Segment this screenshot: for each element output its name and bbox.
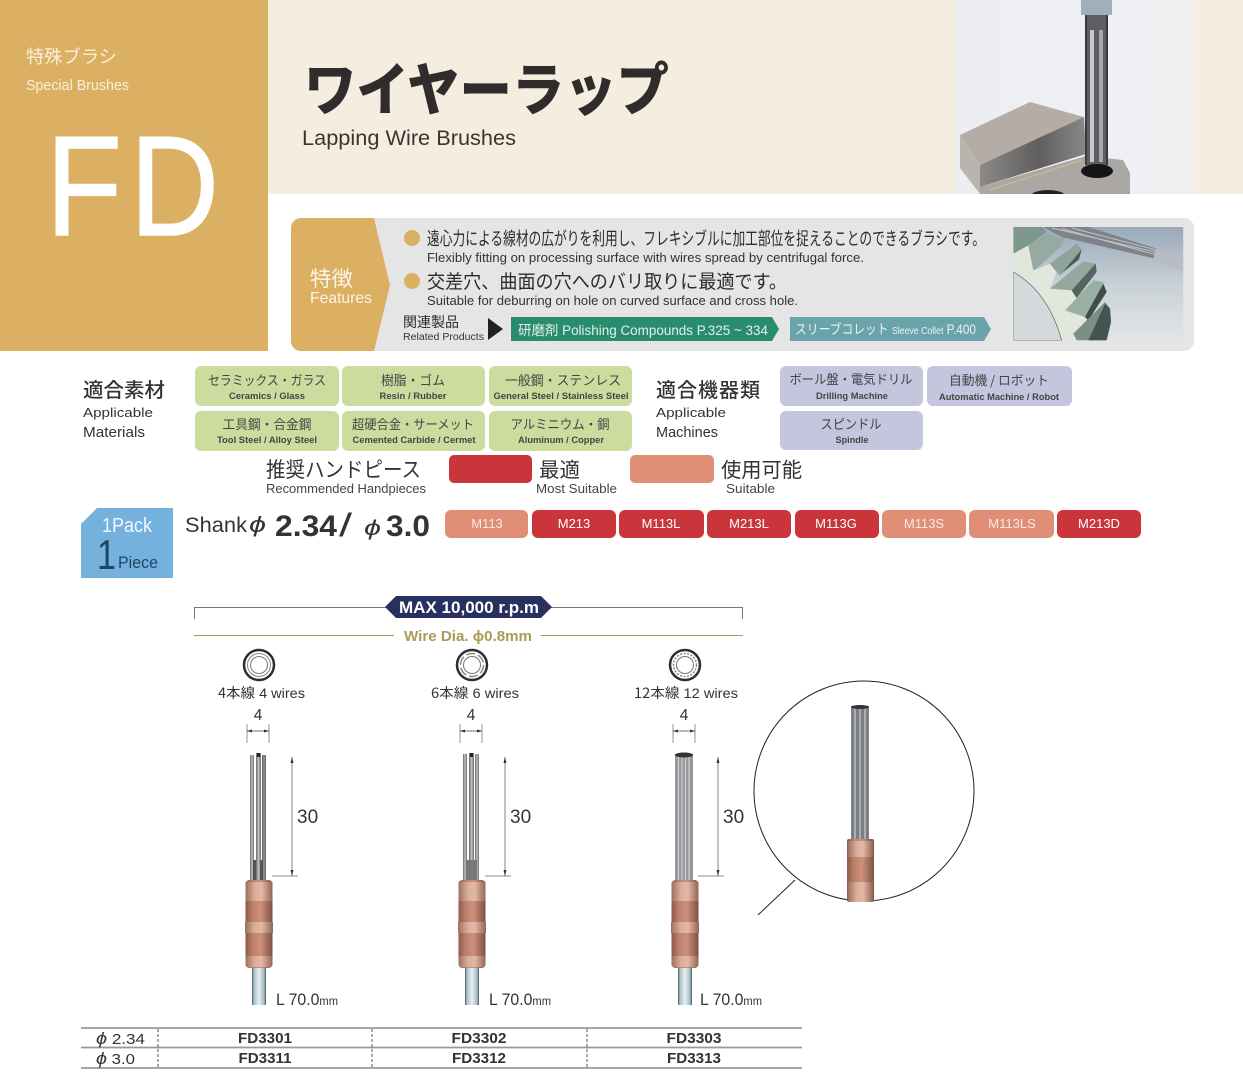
label: 4 wires: 4本線 4 wires: [218, 683, 305, 703]
category panel: FD: [0, 0, 268, 351]
magnified wires: [851, 705, 869, 842]
material: aluminum: Aluminum / Copper: [518, 435, 604, 446]
material: aluminum: アルミニウム・銅: [510, 414, 610, 433]
machine: automatic: Automatic Machine / Robot: [939, 392, 1060, 403]
machine: spindle: スピンドル: [820, 413, 882, 433]
material: ceramics: セラミックス・ガラス: [208, 370, 326, 389]
dimension: width 4: 4: [254, 707, 263, 724]
label: 12 wires: 12本線 12 wires: [634, 683, 738, 703]
shank diameter: [185, 507, 430, 543]
machine: drilling: ボール盤・電気ドリル: [790, 369, 912, 388]
feature 2: 交差穴、曲面の穴へのバリ取りに最適です。: [427, 267, 787, 294]
dimension: length 30: 30: [297, 807, 318, 828]
badge: 1 pack 1 piece: 1Pack: [102, 515, 153, 537]
material: ceramics: [195, 366, 339, 406]
handpiece M113S: [882, 510, 966, 538]
handpiece M113G: M113G: [815, 516, 857, 531]
product: 12 wires: [634, 650, 762, 1009]
legend: most suitable: Most Suitable: [536, 481, 617, 496]
related product: polishing compounds: 研磨剤 Polishing Compounds P.325 ~ 334: [518, 319, 768, 339]
material: tool steel: 工具鋼・合金鋼: [222, 414, 312, 433]
related products label: [403, 312, 484, 343]
shank diameter: ϕ: [364, 517, 381, 540]
material: cemented carbide: Cemented Carbide / Cermet: [352, 435, 476, 446]
max speed bracket: MAX 10,000 r.p.m: [399, 599, 539, 617]
material: tool steel: Tool Steel / Alloy Steel: [217, 435, 317, 446]
material: cemented carbide: 超硬合金・サーメット: [352, 414, 474, 433]
badge: 1 pack 1 piece: Piece: [118, 553, 158, 572]
shank diameter: ϕ: [249, 512, 266, 537]
material: resin: Resin / Rubber: [380, 391, 447, 402]
legend heading: Recommended Handpieces: [266, 481, 426, 496]
series code FD: F: [46, 107, 122, 266]
handpiece buttons: [445, 510, 1141, 538]
machine: drilling: Drilling Machine: [816, 391, 888, 402]
label: 6 wires: 6本線 6 wires: [431, 683, 519, 703]
category name: 特殊ブラシ: [26, 43, 117, 69]
shank diameter: 2.34: [275, 510, 337, 543]
row: 3.0: FD3313: [667, 1051, 721, 1067]
dimension: length 30: 30: [723, 807, 744, 828]
dimension lines: [460, 724, 511, 876]
heading: applicable machines: Applicable: [656, 405, 726, 420]
length label: L 70.0mm: [276, 990, 338, 1009]
material: general steel: 一般鋼・ステンレス: [505, 370, 621, 389]
handpiece M113LS: M113LS: [988, 516, 1036, 531]
heading: applicable machines: Machines: [656, 424, 718, 441]
length label: L 70.0mm: [700, 990, 762, 1009]
related products label: 関連製品: [403, 312, 459, 332]
subtitle: Lapping Wire Brushes: [302, 126, 516, 150]
row: 2.34: [96, 1029, 722, 1048]
product code table: [81, 1028, 802, 1068]
material: general steel: General Steel / Stainless Steel: [494, 391, 628, 402]
icon: arrow: [488, 318, 503, 340]
material: aluminum: [489, 411, 632, 451]
length label: L 70.0mm: [489, 990, 551, 1009]
machine: automatic: [927, 366, 1072, 406]
row: 3.0: FD3311: [238, 1051, 292, 1067]
material: resin: [342, 366, 485, 406]
legend: suitable: [630, 453, 802, 496]
photo: brush entering hole in steel block: [957, 0, 1194, 202]
material: tool steel: [195, 411, 339, 451]
dimension lines: [247, 724, 298, 876]
icon: 6 wire section: [457, 650, 487, 680]
photo: brush on gear teeth: [1013, 227, 1183, 340]
feature 2: Suitable for deburring on hole on curved surface and cross hole.: [427, 294, 798, 308]
row: 2.34: FD3301: [238, 1031, 292, 1047]
machines grid: [780, 366, 1072, 450]
row: 3.0: ϕ 3.0: [96, 1049, 135, 1068]
icon: 4 wire section: [244, 650, 274, 680]
materials grid: [195, 366, 632, 451]
brush 12 wires: [671, 752, 699, 1005]
brush 4 wires: [245, 753, 273, 1005]
dimension lines: [673, 724, 724, 876]
handpiece M213L: [707, 510, 791, 538]
handpiece M113L: M113L: [642, 516, 680, 531]
product: 6 wires: [431, 650, 551, 1009]
features tab: 特徴: [310, 263, 353, 293]
heading: applicable materials: Applicable: [83, 405, 153, 420]
row: 3.0: [96, 1049, 721, 1068]
handpiece M213: [532, 510, 616, 538]
material: resin: 樹脂・ゴム: [381, 370, 445, 389]
related product: sleeve collet: スリーブコレット Sleeve Collet P.400: [795, 318, 976, 338]
row: 2.34: FD3302: [452, 1031, 506, 1047]
heading: applicable materials: Materials: [83, 424, 145, 441]
dimension: width 4: 4: [680, 707, 689, 724]
dimension: length 30: 30: [510, 807, 531, 828]
feature 1: 遠心力による線材の広がりを利用し、フレキシブルに加工部位を捉えることのできるブラシです。: [427, 225, 985, 251]
row: 2.34: ϕ 2.34: [96, 1029, 145, 1048]
legend: most suitable: [449, 453, 617, 496]
product: 4 wires: [218, 650, 338, 1009]
shank diameter: 3.0: [386, 510, 430, 543]
legend heading: [266, 454, 426, 496]
series code FD: [46, 107, 219, 266]
legend: suitable: 使用可能: [721, 453, 802, 483]
feature 2: [404, 267, 798, 308]
magnified ferrule: [847, 839, 874, 902]
related products label: Related Products: [403, 332, 484, 343]
handpiece M113S: M113S: [904, 516, 944, 531]
leader line: [758, 880, 795, 915]
heading: applicable machines: [656, 374, 760, 441]
handpiece M213: M213: [558, 516, 590, 531]
wire diameter: Wire Dia. ϕ0.8mm: [404, 629, 532, 645]
title banner: [268, 0, 1243, 194]
machine: spindle: [780, 411, 923, 450]
features tab: [291, 218, 390, 351]
feature 1: Flexibly fitting on processing surface with wires spread by centrifugal force.: [427, 251, 864, 265]
machine: drilling: [780, 366, 923, 406]
handpiece M213D: M213D: [1078, 516, 1120, 531]
heading: applicable machines: 適合機器類: [656, 374, 760, 403]
handpiece M113G: [795, 510, 879, 538]
handpiece M113LS: [969, 510, 1054, 538]
shank diameter: /: [339, 507, 352, 543]
brush 6 wires: [458, 753, 486, 1005]
series code FD: D: [130, 107, 219, 266]
features tab: Features: [310, 290, 372, 307]
heading: applicable materials: [83, 374, 165, 441]
handpiece M113: [445, 510, 528, 538]
panel: features: [291, 218, 1194, 351]
icon: 12 wire section: [670, 650, 700, 680]
title: ワイヤーラップ: [304, 45, 669, 127]
legend: recommended handpieces: [266, 453, 802, 496]
heading: applicable materials: 適合素材: [83, 374, 165, 403]
material: general steel: [489, 366, 632, 406]
handpiece M213D: [1057, 510, 1141, 538]
category name: Special Brushes: [26, 78, 129, 94]
handpiece M213L: M213L: [729, 516, 769, 531]
handpiece M113: M113: [471, 516, 503, 531]
shank diameter: Shank: [185, 514, 248, 537]
legend: most suitable: 最適: [539, 453, 580, 483]
material: cemented carbide: [342, 411, 485, 451]
detail callout: magnified brush tip: [754, 681, 974, 915]
row: 3.0: FD3312: [452, 1051, 506, 1067]
machine: spindle: Spindle: [836, 435, 868, 446]
badge: 1 pack 1 piece: 1: [97, 531, 116, 578]
machine: automatic: 自動機 / ロボット: [949, 370, 1049, 389]
row: 2.34: FD3303: [666, 1031, 722, 1047]
legend heading: 推奨ハンドピース: [266, 454, 421, 484]
badge: 1 pack 1 piece: [81, 508, 173, 578]
category name: [26, 43, 129, 94]
handpiece M113L: [619, 510, 704, 538]
feature 1: [404, 225, 985, 265]
dimension: width 4: 4: [467, 707, 476, 724]
material: ceramics: Ceramics / Glass: [229, 391, 305, 402]
max speed bracket: [194, 596, 742, 619]
legend: suitable: Suitable: [726, 481, 775, 496]
